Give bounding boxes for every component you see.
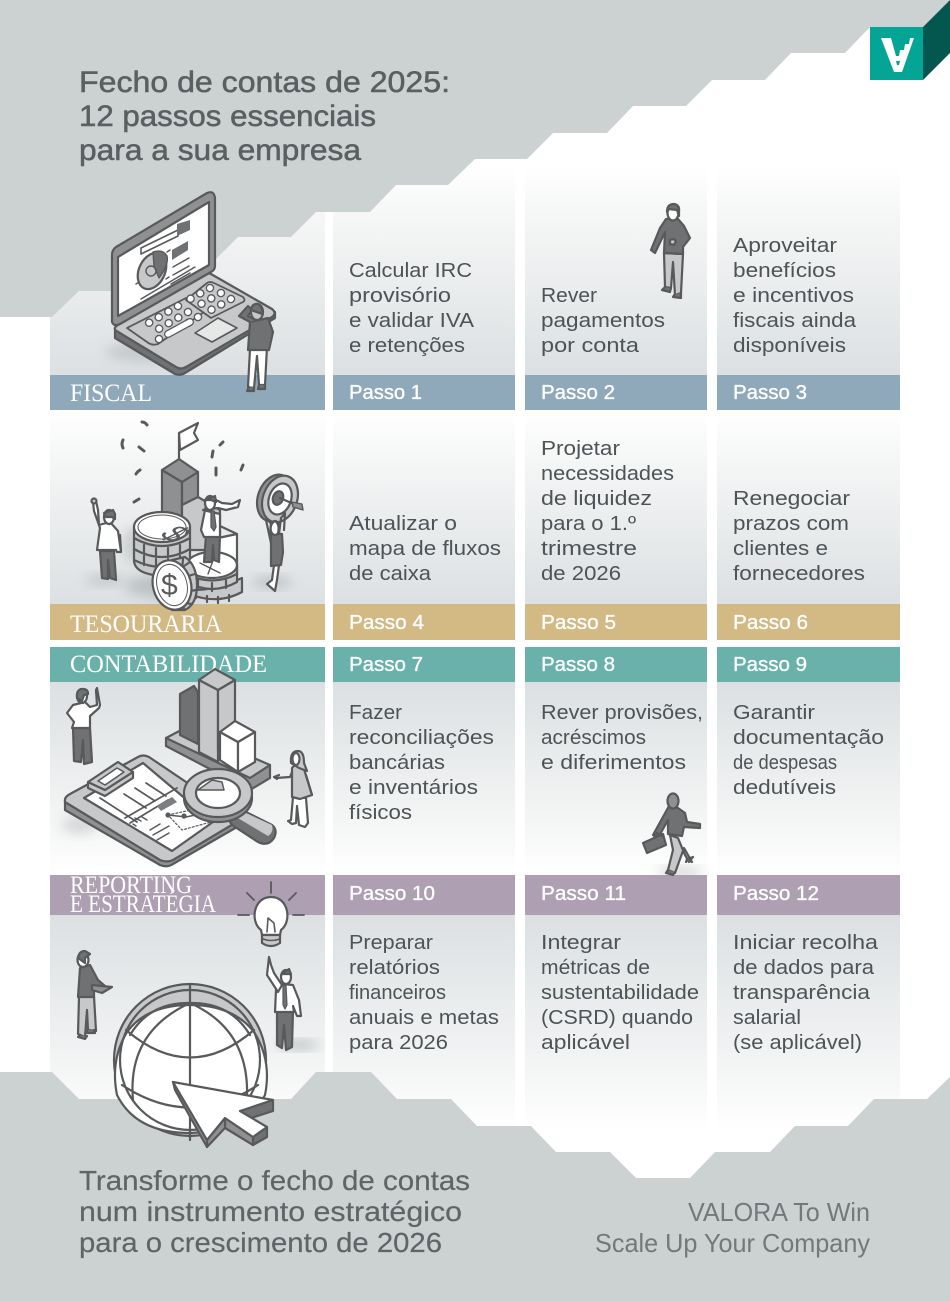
- text: passo 12: Iniciar recolha: [733, 932, 879, 954]
- top stepped background: [0, 0, 950, 317]
- text: passo 12: de dados para: [733, 957, 875, 979]
- text: passo 4: de caixa: [349, 563, 432, 585]
- text: passo 10: Preparar: [349, 932, 433, 954]
- text: passo 4: mapa de fluxos: [349, 538, 501, 560]
- text: passo 6: fornecedores: [733, 563, 865, 585]
- band: contabilidade: CONTABILIDADE: [70, 651, 267, 678]
- text: passo 5: [541, 438, 674, 585]
- text: passo 7: Fazer: [349, 702, 402, 724]
- text: passo 9: [733, 702, 884, 799]
- illustration: reporting globe, cursor, bulb and team: [78, 882, 320, 1147]
- band: fiscal: FISCAL: [70, 380, 152, 407]
- illustration: accounting clipboard and chart: [62, 669, 312, 866]
- band: reporting: Passo 12: [733, 883, 819, 905]
- text: passo 2: Rever: [541, 285, 597, 307]
- text: passo 2: [541, 285, 665, 357]
- text: passo 3: disponíveis: [733, 335, 846, 357]
- text: passo 10: para 2026: [349, 1032, 448, 1054]
- text: passo 5: Projetar: [541, 438, 620, 460]
- text: passo 11: métricas de: [541, 957, 650, 979]
- text: passo 12: [733, 932, 879, 1054]
- text: passo 3: e incentivos: [733, 285, 854, 307]
- text: passo 8: Rever provisões,: [541, 702, 703, 724]
- text: passo 2: pagamentos: [541, 310, 665, 332]
- text: passo 9: dedutíveis: [733, 777, 836, 799]
- band: fiscal: Passo 2: [541, 382, 615, 404]
- tagline: [595, 1197, 870, 1258]
- title: Fecho de contas de 2025:: [79, 66, 450, 99]
- text: passo 4: [349, 513, 501, 585]
- panel: reporting row background: [50, 915, 900, 1130]
- title: 12 passos essenciais: [79, 100, 376, 133]
- text: passo 1: e validar IVA: [349, 310, 475, 332]
- tagline: Scale Up Your Company: [595, 1228, 870, 1258]
- illustration: standing person: [651, 204, 690, 298]
- band: reporting: REPORTING: [70, 872, 192, 899]
- band: reporting: [50, 872, 900, 918]
- text: passo 7: e inventários: [349, 777, 478, 799]
- band: fiscal: [50, 375, 900, 410]
- text: passo 10: [349, 932, 499, 1054]
- text: passo 6: Renegociar: [733, 488, 850, 510]
- closing message: [79, 1165, 470, 1258]
- band: reporting: E ESTRATÉGIA: [70, 890, 216, 918]
- band: reporting: Passo 11: [541, 883, 626, 905]
- illustration: walking person: [643, 794, 704, 876]
- text: passo 12: (se aplicável): [733, 1032, 862, 1054]
- panel: fiscal row background: [50, 165, 900, 376]
- text: passo 6: clientes e: [733, 538, 828, 560]
- illustration: treasury coins and team: $: [161, 569, 178, 602]
- illustration: treasury coins and team: [85, 422, 304, 614]
- text: passo 6: prazos com: [733, 513, 849, 535]
- title: [79, 66, 450, 167]
- text: passo 4: Atualizar o: [349, 513, 457, 535]
- text: passo 5: necessidades: [541, 463, 674, 485]
- text: passo 9: de despesas: [733, 752, 837, 774]
- text: passo 10: anuais e metas: [349, 1007, 499, 1029]
- illustration: treasury coins and team: $: [151, 521, 200, 547]
- text: passo 11: aplicável: [541, 1032, 630, 1054]
- closing message: Transforme o fecho de contas: [79, 1165, 470, 1196]
- text: passo 1: [349, 260, 475, 357]
- band: fiscal: Passo 3: [733, 382, 807, 404]
- text: passo 8: acréscimos: [541, 727, 646, 749]
- text: passo 10: relatórios: [349, 957, 440, 979]
- text: passo 1: Calcular IRC: [349, 260, 472, 282]
- text: passo 3: Aproveitar: [733, 235, 837, 257]
- text: passo 8: [541, 702, 703, 774]
- text: passo 9: Garantir: [733, 702, 815, 724]
- text: passo 11: Integrar: [541, 932, 621, 954]
- panel: contabilidade row background: [50, 682, 900, 876]
- band: tesouraria: Passo 6: [733, 612, 808, 634]
- band: tesouraria: TESOURARIA: [70, 611, 222, 638]
- text: passo 1: e retenções: [349, 335, 465, 357]
- icon: VALORA logo: [870, 0, 950, 80]
- text: passo 2: por conta: [541, 335, 640, 357]
- text: passo 5: trimestre: [541, 538, 637, 560]
- text: passo 3: [733, 235, 857, 357]
- band: contabilidade: [50, 647, 900, 682]
- text: passo 12: salarial: [733, 1007, 801, 1029]
- text: passo 3: fiscais ainda: [733, 310, 857, 332]
- text: passo 3: benefícios: [733, 260, 836, 282]
- band: tesouraria: Passo 4: [349, 612, 424, 634]
- title: para a sua empresa: [79, 134, 361, 167]
- closing message: para o crescimento de 2026: [79, 1227, 442, 1258]
- illustration: laptop with person: [105, 192, 275, 391]
- band: tesouraria: Passo 5: [541, 612, 616, 634]
- band: contabilidade: Passo 7: [349, 654, 423, 676]
- panel: tesouraria row background: [50, 411, 900, 605]
- text: passo 11: [541, 932, 699, 1054]
- band: contabilidade: Passo 8: [541, 654, 615, 676]
- text: passo 12: transparência: [733, 982, 871, 1004]
- tagline: VALORA To Win: [688, 1197, 870, 1227]
- text: passo 5: para o 1.º: [541, 513, 637, 535]
- text: passo 11: (CSRD) quando: [541, 1007, 693, 1029]
- band: reporting: Passo 10: [349, 883, 435, 905]
- text: passo 7: físicos: [349, 802, 412, 824]
- text: passo 11: sustentabilidade: [541, 982, 699, 1004]
- band: contabilidade: Passo 9: [733, 654, 807, 676]
- bottom stepped background: [0, 1072, 950, 1301]
- text: passo 9: documentação: [733, 727, 884, 749]
- text: passo 8: e diferimentos: [541, 752, 686, 774]
- closing message: num instrumento estratégico: [79, 1196, 462, 1227]
- text: passo 5: de 2026: [541, 563, 621, 585]
- text: passo 6: [733, 488, 865, 585]
- text: passo 7: bancárias: [349, 752, 445, 774]
- band: tesouraria: [50, 604, 900, 640]
- text: passo 10: financeiros: [349, 982, 446, 1004]
- text: passo 5: de liquidez: [541, 488, 652, 510]
- band: fiscal: Passo 1: [349, 382, 422, 404]
- text: passo 1: provisório: [349, 285, 451, 307]
- text: passo 7: [349, 702, 494, 824]
- text: passo 7: reconciliações: [349, 727, 494, 749]
